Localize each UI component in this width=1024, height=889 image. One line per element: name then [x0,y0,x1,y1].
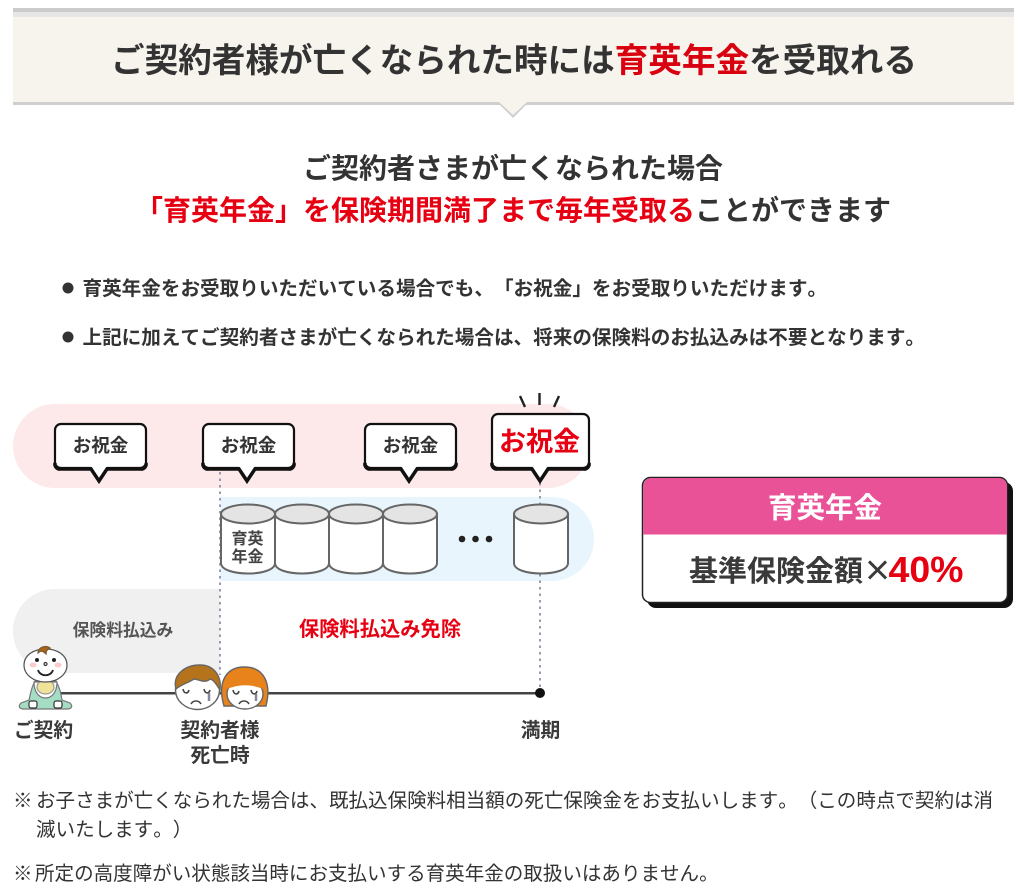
icon: spouse face [222,667,268,709]
footnotes: 滅いたします。） [36,819,192,841]
bubble: celebration money 2: お祝金 [221,435,277,456]
bullet list: 上記に加えてご契約者さまが亡くなられた場合は、将来の保険料のお払込みは不要となります。 [82,326,925,349]
band: premium payment [13,589,220,673]
timeline labels: 満期 [521,720,560,742]
ellipsis dots [459,536,492,542]
footnotes: ※ [13,863,33,885]
footnotes: お子さまが亡くなられた場合は、既払込保険料相当額の死亡保険金をお支払いします。（この時点で契約は消 [36,790,993,812]
premium waiver label: 保険料払込み免除 [299,618,461,641]
bubble: celebration money 3: お祝金 [383,435,439,456]
cylinder label: 年金 [231,547,264,566]
bullet list: 育英年金をお受取りいただいている場合でも、「お祝金」をお受取りいただけます。 [82,277,827,300]
bubble: maturity celebration money [492,414,589,481]
band: education annuity [220,497,594,581]
timeline axis [60,688,545,698]
subheading [135,152,891,226]
footnotes [13,790,993,885]
panel: annuity amount [642,478,1013,608]
subheading: ご契約者さまが亡くなられた場合 [303,152,723,184]
icon: parent face [175,665,220,710]
timeline labels: 契約者様 [180,720,260,742]
bubble: celebration money 3 [365,424,456,481]
band: celebration money [13,404,590,488]
bullet list [62,277,925,349]
cylinder label: 育英 [231,529,264,548]
bubble: celebration money 1 [55,424,146,481]
cylinders [221,504,568,574]
subheading: 「育英年金」を保険期間満了まで毎年受取ることができます [135,194,891,226]
header banner [13,8,1014,118]
footnotes: 所定の高度障がい状態該当時にお支払いする育英年金の取扱いはありません。 [35,863,719,885]
title: ご契約者様が亡くなられた時には育英年金を受取れる [111,41,917,80]
sparkle rays [520,393,559,407]
bubble: celebration money 2 [203,424,294,481]
bubble: maturity celebration money: お祝金 [499,427,580,457]
timeline labels [14,719,560,767]
footnotes: ※ [13,790,33,812]
formula: 基準保険金額× [689,548,892,590]
cylinder label [231,529,264,566]
bubble: celebration money 1: お祝金 [73,435,129,456]
panel heading: 育英年金 [768,492,882,524]
band: premium payment: 保険料払込み [73,621,174,640]
dotted guide lines [220,472,540,690]
icon: baby [19,647,72,709]
timeline diagram [13,393,594,767]
formula: 40% [888,549,964,590]
timeline labels: 死亡時 [190,745,250,767]
timeline labels: ご契約 [14,719,73,742]
